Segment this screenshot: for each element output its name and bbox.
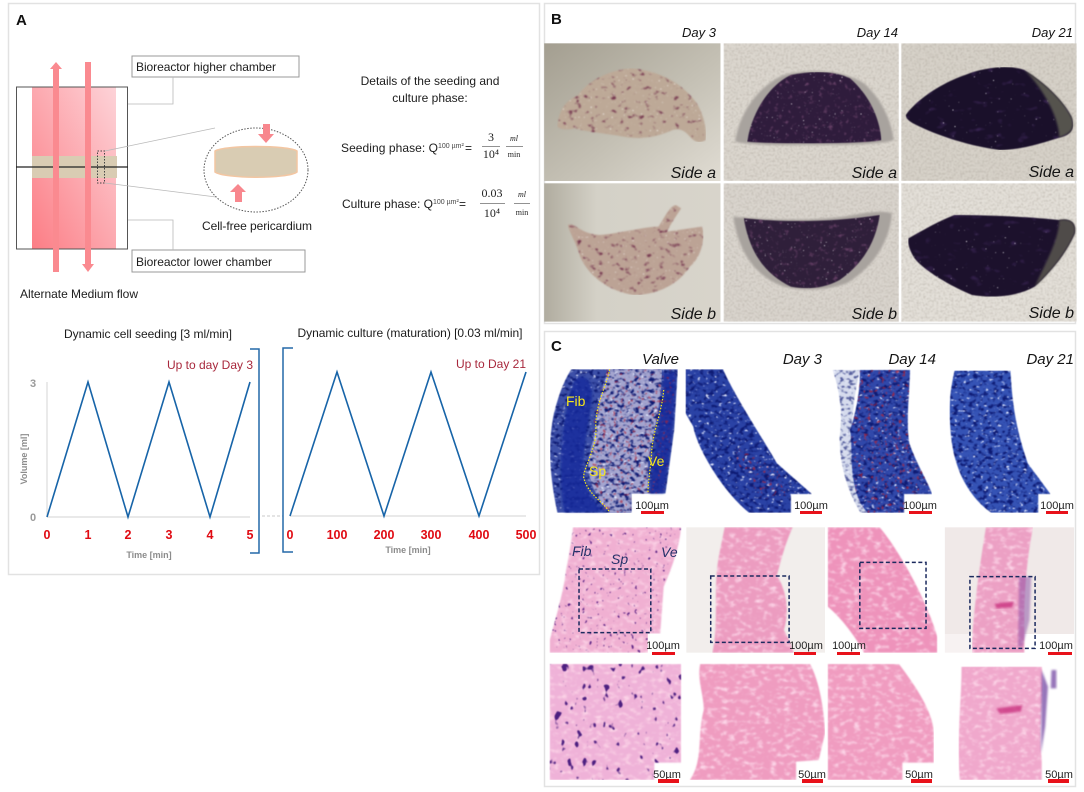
column headings xyxy=(642,351,1074,368)
column headings: Valve xyxy=(642,351,679,368)
column headings: Day 14 xyxy=(857,25,898,40)
photo: day 14 side a xyxy=(724,43,899,181)
line series xyxy=(47,382,250,517)
note: up to day 3: Up to day Day 3 xyxy=(167,358,253,372)
line series xyxy=(290,372,526,516)
chamber outline xyxy=(16,87,128,249)
column headings: Day 3 xyxy=(783,351,823,368)
x axis labels xyxy=(44,528,254,560)
section: day 3 trichrome xyxy=(686,369,812,513)
seeding formula: min xyxy=(508,150,520,159)
column headings: Day 14 xyxy=(888,351,936,368)
medium fill xyxy=(32,87,116,249)
note: up to day 21: Up to Day 21 xyxy=(456,357,526,371)
right bracket xyxy=(250,349,259,553)
scale bars: 100µm xyxy=(1039,640,1073,652)
x axis labels: 1 xyxy=(85,528,92,542)
x axis labels: 200 xyxy=(374,528,394,542)
panel C frame xyxy=(544,332,1076,786)
chart: dynamic cell seeding xyxy=(19,327,259,560)
arrow: pressure down xyxy=(258,124,274,143)
valve layer labels, trichrome: Sp xyxy=(589,463,606,479)
arrow: medium flow down xyxy=(82,62,94,272)
scale bars: 100µm xyxy=(903,500,937,512)
side labels: Side a xyxy=(852,165,897,182)
details heading: Details of the seeding and xyxy=(361,74,499,88)
valve layer labels, trichrome: Fib xyxy=(566,393,586,409)
valve layer labels, trichrome xyxy=(566,393,665,479)
section: day 14 trichrome xyxy=(833,370,932,513)
x axis labels: Time [min] xyxy=(126,550,172,560)
column headings: Day 21 xyxy=(1032,25,1073,40)
side labels: Side a xyxy=(1029,164,1074,181)
column headings xyxy=(682,25,1073,40)
photo: day 21 side a xyxy=(901,43,1077,181)
side labels: Side a xyxy=(671,165,716,182)
bioreactor schematic xyxy=(16,62,128,272)
culture formula: 100 µm² xyxy=(433,199,459,206)
x axis labels: 3 xyxy=(166,528,173,542)
side labels: Side b xyxy=(671,306,716,323)
scale bars xyxy=(635,500,1074,783)
seeding formula: 100 µm² xyxy=(438,143,464,150)
seeding formula xyxy=(341,130,523,161)
scale bars: 100µm xyxy=(789,640,823,652)
scale bars: 100µm xyxy=(646,640,680,652)
inset boxes xyxy=(579,562,1035,648)
scale bars: 100µm xyxy=(635,500,669,512)
scale bars: 100µm xyxy=(832,640,866,652)
culture formula: = xyxy=(459,197,466,211)
side labels xyxy=(671,164,1074,323)
phase details xyxy=(341,74,530,220)
caption: alternate medium flow: Alternate Medium flow xyxy=(20,287,138,301)
tissue boundary dotted lines xyxy=(584,369,664,512)
side labels: Side b xyxy=(1029,305,1074,322)
seeding formula: ml xyxy=(510,134,519,143)
chart title: Dynamic cell seeding [3 ml/min] xyxy=(64,327,232,341)
valve layer labels, H&E: Ve xyxy=(661,544,678,560)
side labels: Side b xyxy=(852,306,897,323)
arrow: pressure up xyxy=(230,184,246,202)
y axis labels: 3 xyxy=(30,378,36,390)
x axis labels: 500 xyxy=(516,528,536,542)
section: day 21 H&E xyxy=(945,527,1074,653)
label: bioreactor lower chamber xyxy=(132,250,305,272)
y axis labels xyxy=(19,378,36,524)
culture formula: Culture phase: Q xyxy=(342,197,433,211)
label: bioreactor higher chamber xyxy=(132,56,299,77)
label: bioreactor higher chamber: Bioreactor higher chamber xyxy=(136,60,276,74)
culture formula xyxy=(342,186,530,220)
zoom selection box xyxy=(98,151,104,183)
panel B frame xyxy=(544,4,1076,324)
panel A frame xyxy=(8,4,540,574)
x axis labels: 100 xyxy=(327,528,347,542)
scale bars: 50µm xyxy=(798,769,826,781)
panel letter C: C xyxy=(551,338,562,355)
valve layer labels, H&E: Fib xyxy=(572,543,592,559)
section: day 14 H&E xyxy=(828,527,937,653)
culture formula: ml xyxy=(518,190,527,199)
left bracket xyxy=(283,348,293,552)
baseline xyxy=(290,515,526,517)
x axis labels: 0 xyxy=(44,528,51,542)
panel C: histology xyxy=(544,332,1076,786)
x axis labels: 5 xyxy=(247,528,254,542)
seeding formula: = xyxy=(465,141,472,155)
panel A: bioreactor set-up and flow profiles xyxy=(8,4,540,574)
column headings: Day 3 xyxy=(682,25,717,40)
photo: day 3 side a xyxy=(544,43,720,181)
section: valve magnified xyxy=(550,664,681,780)
x axis labels: 300 xyxy=(421,528,441,542)
x axis labels xyxy=(287,528,536,555)
chamber divider xyxy=(16,166,128,168)
label: bioreactor lower chamber: Bioreactor lower chamber xyxy=(136,255,272,269)
section: day 3 magnified xyxy=(690,664,825,780)
detail: cell-free pericardium xyxy=(204,124,308,212)
panel letter A: A xyxy=(16,12,27,29)
y axis labels: Volume [ml] xyxy=(19,434,29,484)
x axis labels: 0 xyxy=(287,528,294,542)
column headings: Day 21 xyxy=(1026,351,1074,368)
scale bars: 100µm xyxy=(1040,500,1074,512)
scale bars: 50µm xyxy=(653,769,681,781)
photo: day 3 side b xyxy=(544,183,720,322)
photo grid xyxy=(544,43,1077,322)
row 1: trichrome stain xyxy=(550,369,1050,513)
valve layer labels, trichrome: Ve xyxy=(648,453,665,469)
y axis labels: 0 xyxy=(30,512,36,524)
section: day 21 trichrome xyxy=(950,371,1050,513)
arrow: medium flow up xyxy=(50,62,62,272)
photo: day 21 side b xyxy=(901,183,1077,322)
chart title: Dynamic culture (maturation) [0.03 ml/min] xyxy=(298,326,522,340)
pericardium disc xyxy=(215,146,297,177)
valve layer labels, H&E xyxy=(572,543,678,567)
culture formula: min xyxy=(516,208,528,217)
culture formula: 0.03 xyxy=(482,186,502,200)
valve layer labels, H&E: Sp xyxy=(611,551,628,567)
axes xyxy=(47,382,250,517)
photo: day 14 side b xyxy=(724,183,899,322)
section: day 21 magnified xyxy=(959,667,1056,780)
section: valve H&E xyxy=(550,527,681,653)
scale bars: 50µm xyxy=(1045,769,1073,781)
panel B: whole-mount stained leaflets xyxy=(544,4,1077,324)
seeding formula: 3 xyxy=(488,130,494,144)
row 3: H&E magnified xyxy=(550,664,1056,780)
x axis labels: 4 xyxy=(207,528,214,542)
x axis labels: 400 xyxy=(469,528,489,542)
scale bars: 50µm xyxy=(905,769,933,781)
seeding formula: Seeding phase: Q xyxy=(341,141,438,155)
pericardium band xyxy=(32,156,117,178)
section: day 3 H&E xyxy=(686,527,825,653)
culture formula: 10⁴ xyxy=(484,206,500,220)
caption: cell-free pericardium: Cell-free pericardium xyxy=(202,219,312,233)
seeding formula: 10⁴ xyxy=(483,147,499,161)
section: valve trichrome xyxy=(550,369,678,513)
section: day 14 magnified xyxy=(828,664,934,780)
x axis labels: Time [min] xyxy=(385,545,431,555)
chart: dynamic culture xyxy=(283,326,536,555)
dotted magnifier circle xyxy=(204,128,308,212)
panel letter B: B xyxy=(551,11,562,28)
phase details: culture phase: xyxy=(392,91,468,105)
row 2: H&E overview xyxy=(550,527,1074,653)
x axis labels: 2 xyxy=(125,528,132,542)
scale bars: 100µm xyxy=(794,500,828,512)
